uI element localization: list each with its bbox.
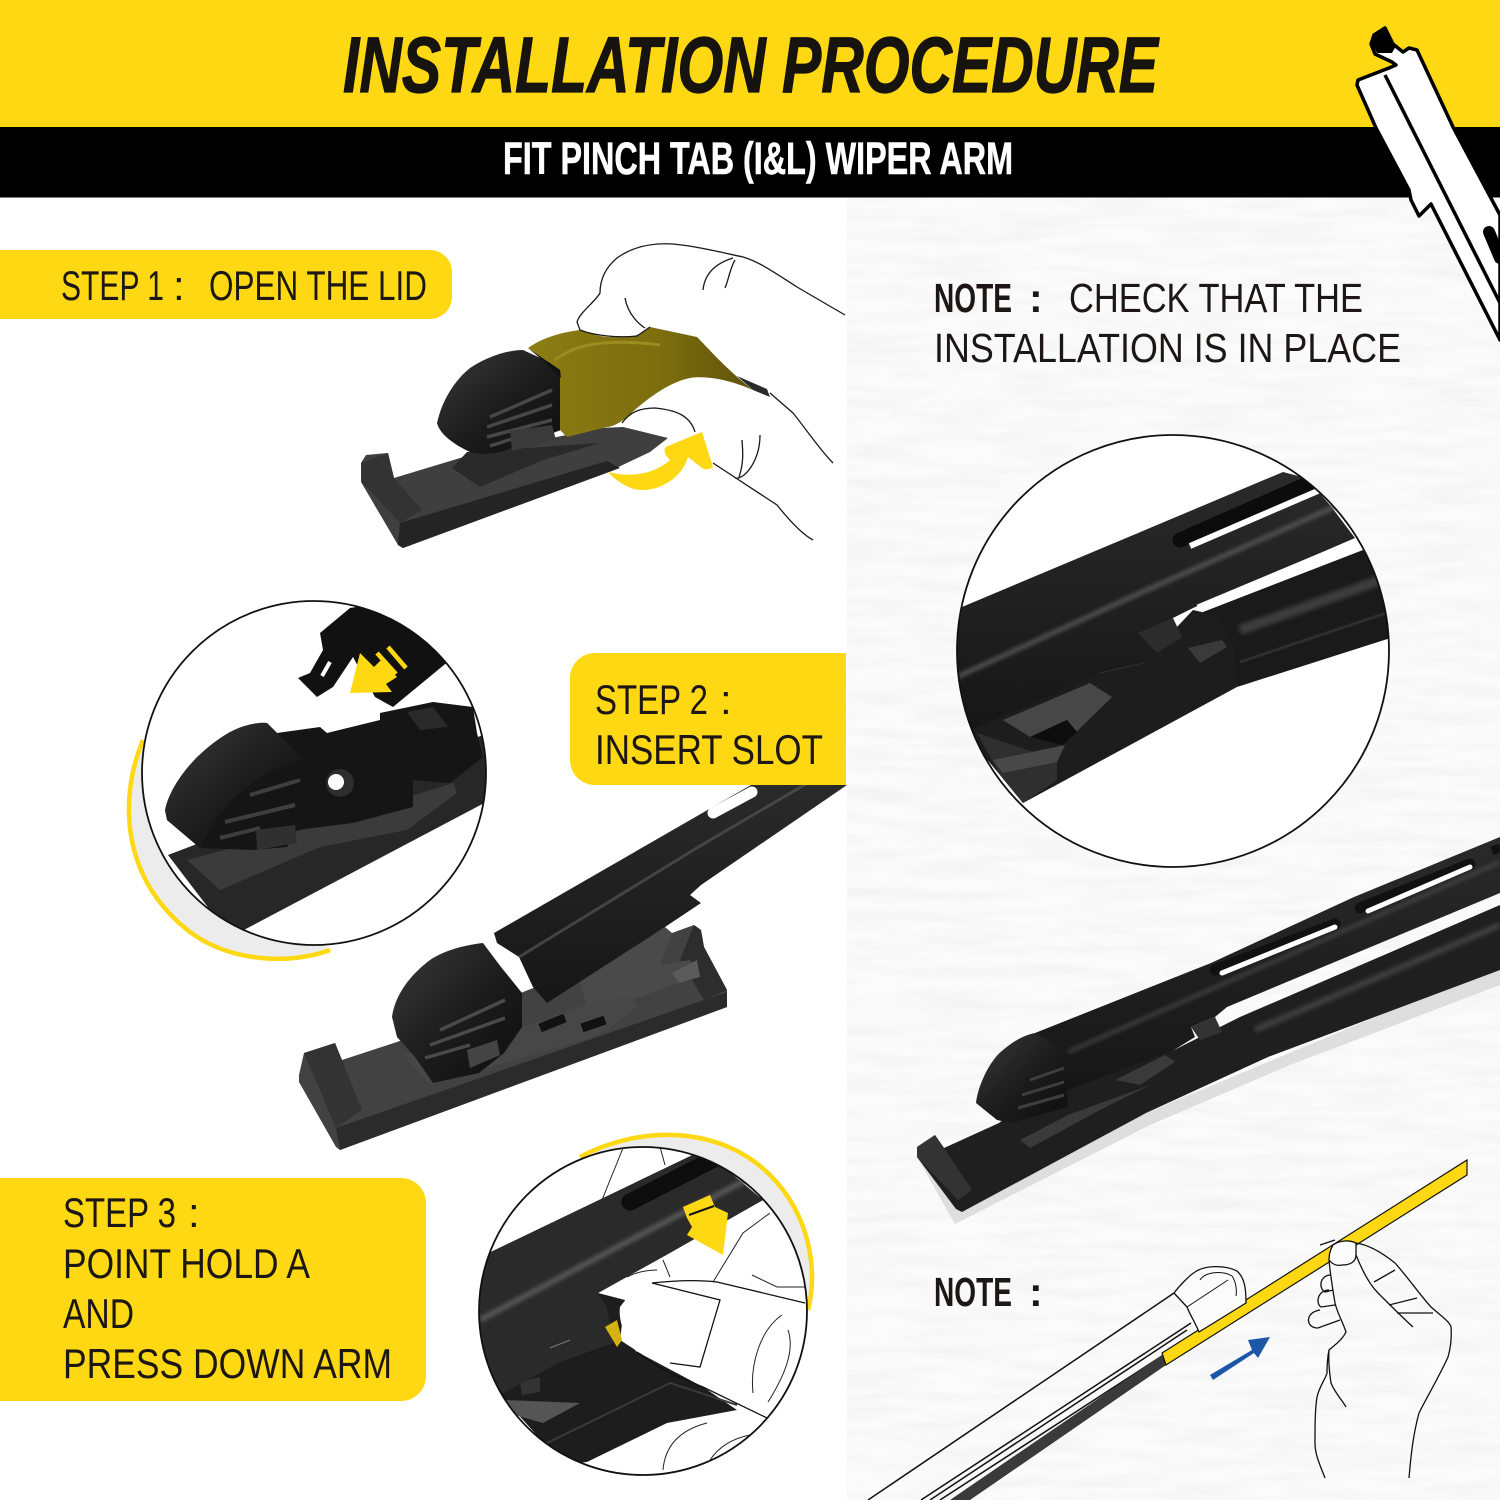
curved arrow <box>608 432 713 490</box>
text: note check installation: NOTE <box>934 275 1012 321</box>
wiper arm <box>494 785 847 1003</box>
arm hook <box>298 600 450 707</box>
arrow: blue <box>1210 1337 1270 1380</box>
subheader band <box>0 127 1500 198</box>
blade outline <box>868 1293 1199 1500</box>
panel: step 2 label <box>570 653 846 785</box>
small yellow tab <box>605 1320 622 1347</box>
yellow lid <box>528 327 753 437</box>
hand outline <box>577 244 845 540</box>
plate and blade backing <box>917 905 1500 1212</box>
callout: check installation detail circle <box>950 435 1400 867</box>
arm <box>1035 837 1500 1090</box>
panel: step 2 label: STEP 2 <box>595 676 708 723</box>
panel: step 3 label: STEP 3 <box>63 1189 176 1236</box>
panel: step 1 label <box>0 250 452 319</box>
yellow strip <box>1162 1160 1467 1365</box>
hand <box>1315 1240 1451 1478</box>
illustration: assembled wiper arm <box>917 837 1500 1224</box>
finger sketch lines <box>602 1147 805 1470</box>
panel: step 3 label: AND <box>63 1290 134 1337</box>
yellow down arrow <box>683 1195 728 1255</box>
text: note check installation <box>934 275 1401 371</box>
base plate <box>168 735 490 932</box>
text: second note: : <box>1029 1269 1043 1315</box>
blade clip <box>1174 1267 1246 1332</box>
panel: step 3 label <box>0 1178 426 1401</box>
illustration: sliding wiper rubber with hand <box>868 1160 1467 1500</box>
white gap <box>1196 543 1344 606</box>
callout: step 3 detail circle <box>470 1135 812 1475</box>
adapter head <box>392 943 522 1083</box>
icon: wiper arm end outline <box>1357 28 1500 340</box>
dark adapter area <box>470 1150 763 1463</box>
title: INSTALLATION PROCEDURE <box>343 20 1160 109</box>
panel: textured right background <box>847 197 1500 1500</box>
pivot hole <box>326 769 354 797</box>
yellow arrow <box>350 653 397 693</box>
lower body <box>950 610 1237 803</box>
yellow crescent <box>129 740 330 959</box>
header banner <box>0 0 1500 127</box>
arm <box>958 472 1355 700</box>
text: note check installation: INSTALLATION IS IN PLACE <box>934 325 1401 371</box>
thumb <box>620 1300 640 1354</box>
panel: step 3 label: PRESS DOWN ARM <box>63 1340 392 1387</box>
blade <box>1203 550 1400 687</box>
wiper adapter base <box>361 427 668 548</box>
callout: step 2 detail circle <box>129 600 490 959</box>
panel: step 1 label: : <box>173 262 185 309</box>
shadow <box>917 965 1500 1224</box>
subtitle: FIT PINCH TAB (I&L) WIPER ARM <box>503 133 1013 184</box>
text: note check installation: : <box>1029 275 1043 321</box>
text: note check installation: CHECK THAT THE <box>1069 275 1363 321</box>
panel: step 3 label: POINT HOLD A <box>63 1240 310 1287</box>
dark rubber strip <box>950 1355 1166 1500</box>
illustration: opening the lid with hand <box>361 244 845 548</box>
panel: step 3 label: : <box>188 1189 200 1236</box>
side tabs <box>1191 1017 1222 1040</box>
text: second note: NOTE <box>934 1269 1012 1315</box>
illustration: arm inserted in adapter <box>299 760 847 1150</box>
adapter body <box>165 702 483 850</box>
adapter head <box>976 1033 1068 1123</box>
panel: step 2 label: INSERT SLOT <box>595 726 823 773</box>
release tabs <box>1138 618 1182 653</box>
arm <box>470 1150 763 1395</box>
adapter head <box>437 350 561 454</box>
panel: step 2 label: : <box>720 676 732 723</box>
yellow crescent <box>580 1135 812 1310</box>
panel: step 1 label: OPEN THE LID <box>209 262 427 309</box>
adapter base <box>299 925 727 1150</box>
panel: step 1 label: STEP 1 <box>61 262 164 309</box>
